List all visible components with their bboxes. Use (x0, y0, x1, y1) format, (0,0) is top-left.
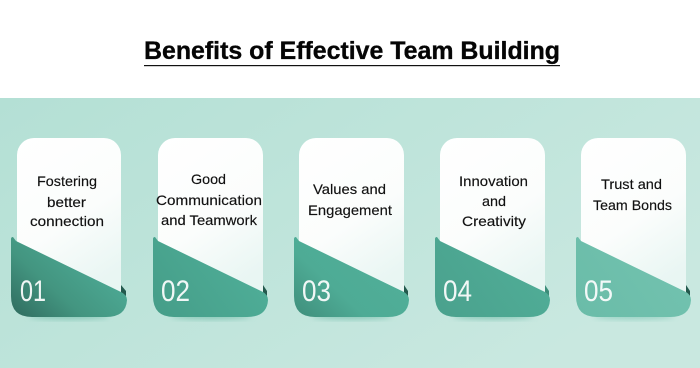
card 05: 05 (584, 275, 613, 308)
card 03: Engagement (308, 202, 392, 218)
card 04: 04 (443, 275, 472, 308)
background panel (0, 98, 700, 368)
card 01: Fostering (37, 173, 97, 189)
card 01: better (47, 194, 86, 210)
card 02: 02 (161, 275, 190, 308)
card 05: Team Bonds (593, 197, 672, 213)
title: Benefits of Effective Team Building (144, 37, 560, 65)
card 03: Values and (313, 181, 386, 197)
card 01 (11, 138, 127, 319)
card 02 (153, 138, 268, 319)
card 04 (435, 138, 550, 319)
card 04: Innovation (459, 173, 528, 189)
card 02: Good (191, 171, 226, 187)
card 04: and (482, 193, 506, 209)
card 02: and Teamwork (161, 212, 258, 228)
card 01: 01 (20, 275, 46, 308)
card 05 (576, 138, 691, 319)
card 03 (294, 138, 409, 319)
card 04: Creativity (462, 213, 526, 229)
card 05: Trust and (601, 176, 662, 192)
card 03: 03 (302, 275, 331, 308)
card 01: connection (30, 213, 104, 229)
card 02: Communication (156, 192, 262, 208)
